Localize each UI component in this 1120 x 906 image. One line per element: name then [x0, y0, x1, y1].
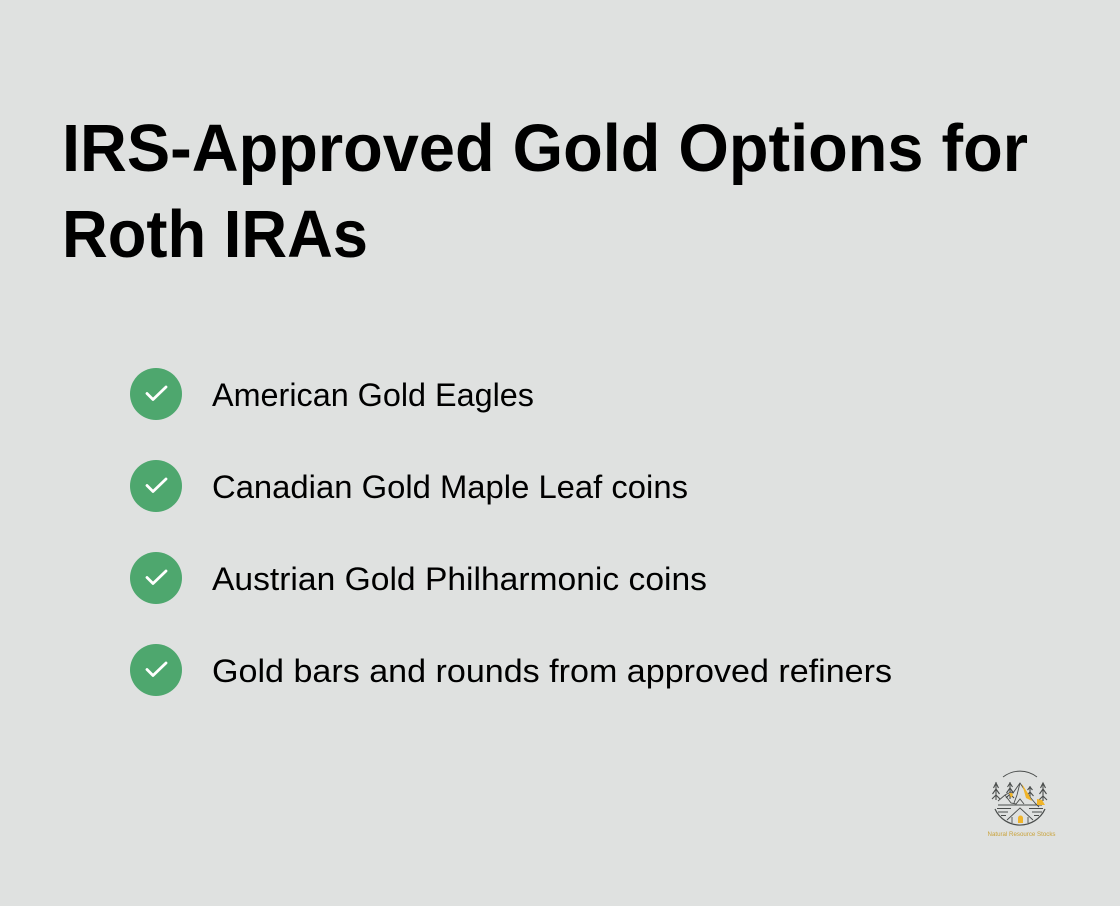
- title: Roth IRAs: [62, 197, 368, 272]
- title: [62, 111, 1028, 272]
- logo caption: Natural Resource Stocks: [988, 831, 1056, 838]
- item: Austrian Gold Philharmonic coins: [130, 552, 707, 604]
- item: Gold bars and rounds from approved refiners: [130, 644, 892, 696]
- icon: mountain and cabin emblem: [992, 771, 1047, 825]
- item: Gold bars and rounds from approved refiners: Gold bars and rounds from approved refiners: [212, 653, 892, 689]
- item: Canadian Gold Maple Leaf coins: [130, 460, 688, 512]
- item: American Gold Eagles: [130, 368, 534, 420]
- title: IRS-Approved Gold Options for: [62, 111, 1028, 186]
- logo: Natural Resource Stocks: [988, 771, 1056, 838]
- item: American Gold Eagles: American Gold Eagles: [212, 377, 534, 413]
- item: Austrian Gold Philharmonic coins: Austrian Gold Philharmonic coins: [212, 561, 707, 597]
- item: Canadian Gold Maple Leaf coins: Canadian Gold Maple Leaf coins: [212, 469, 688, 505]
- checklist: [130, 368, 892, 696]
